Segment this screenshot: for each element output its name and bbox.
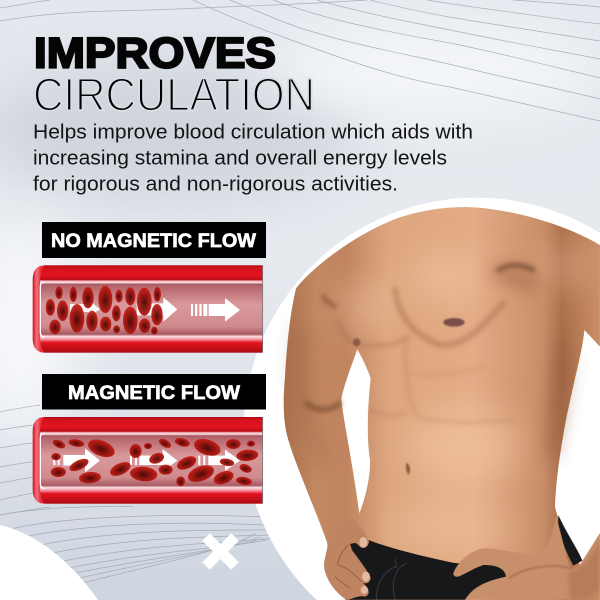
white arrows <box>53 448 240 472</box>
panel: magnetic flow label: MAGNETIC FLOW <box>68 382 241 404</box>
gap between arm and torso <box>341 349 371 513</box>
panel: no magnetic flow label <box>42 222 266 258</box>
white arrows <box>70 297 240 322</box>
panel: no magnetic flow label: NO MAGNETIC FLOW <box>51 230 257 252</box>
shading <box>290 265 571 470</box>
panel: vessel with magnetic flow <box>33 417 263 504</box>
panel: magnetic flow label <box>42 374 266 410</box>
panel: vessel without magnetic flow <box>33 265 263 353</box>
white circle behind the photo <box>244 198 600 600</box>
hand right <box>453 515 600 600</box>
red blood cells <box>46 286 163 335</box>
red blood cells <box>51 436 259 487</box>
title <box>33 30 315 120</box>
body silhouette <box>284 207 600 600</box>
navel <box>406 463 410 475</box>
shorts <box>345 540 517 600</box>
white corner shape bottom left <box>0 525 98 600</box>
photo: shirtless torso <box>284 207 600 600</box>
nipple <box>443 318 465 327</box>
title: CIRCULATION <box>33 68 315 120</box>
hand left fingers <box>324 518 371 600</box>
description text <box>33 120 473 196</box>
title: IMPROVES <box>34 30 276 78</box>
description text: for rigorous and non-rigorous activities. <box>33 172 398 196</box>
description text: Helps improve blood circulation which aids with <box>33 120 473 144</box>
description text: increasing stamina and overall energy levels <box>33 146 447 170</box>
icon: white cross <box>206 537 235 566</box>
